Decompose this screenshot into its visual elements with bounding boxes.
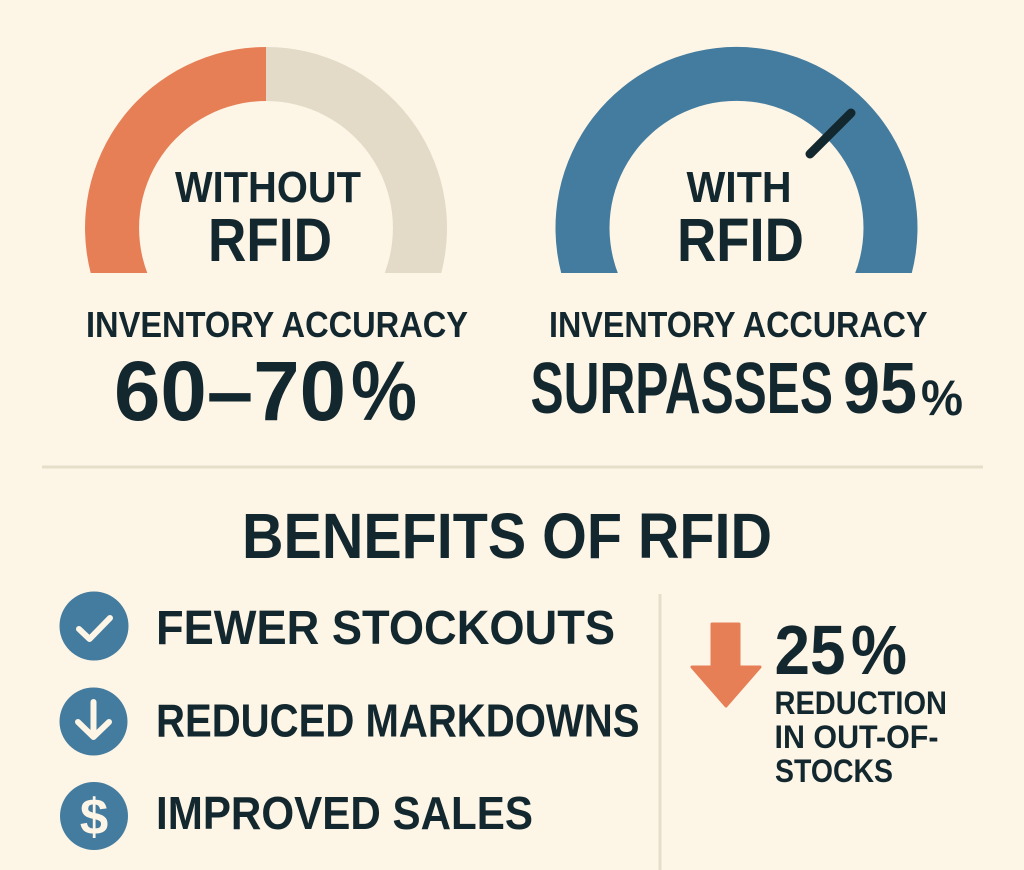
gauge: with RFID — [556, 47, 918, 273]
stat: 60-70: 60–70 — [114, 344, 346, 438]
callout: reduction in out-of-stocks: REDUCTION — [774, 685, 947, 721]
heading: benefits of RFID: BENEFITS OF RFID — [242, 500, 772, 572]
benefit: fewer stockouts: FEWER STOCKOUTS — [156, 602, 615, 655]
gauge label: with: WITH — [686, 163, 792, 212]
stat: percent sign right: % — [921, 370, 963, 426]
callout: reduction in out-of-stocks: IN OUT-OF- — [774, 719, 938, 755]
callout: reduction in out-of-stocks — [774, 685, 947, 789]
benefit: reduced markdowns: REDUCED MARKDOWNS — [156, 694, 640, 746]
gauge label: RFID right: RFID — [677, 206, 804, 274]
icon: down arrow — [60, 688, 128, 756]
stat: surpasses: SURPASSES — [530, 349, 833, 429]
benefit: improved sales: IMPROVED SALES — [156, 787, 533, 839]
stat: percent sign left: % — [351, 344, 417, 438]
gauge label: without: WITHOUT — [175, 163, 361, 212]
icon: orange down arrow — [692, 624, 760, 706]
icon: check — [60, 592, 128, 660]
stat: 95: 95 — [843, 349, 917, 429]
caption: inventory accuracy left: INVENTORY ACCURACY — [86, 304, 468, 345]
stat: 25: 25 — [774, 611, 846, 689]
gauge: without RFID — [85, 47, 447, 273]
callout: reduction in out-of-stocks: STOCKS — [775, 753, 893, 789]
icon: dollar — [60, 782, 128, 850]
stat: percent sign: % — [851, 611, 907, 689]
icon: dollar: $ — [80, 788, 108, 845]
gauge label: RFID left: RFID — [208, 206, 332, 274]
caption: inventory accuracy right: INVENTORY ACCURACY — [549, 304, 928, 345]
